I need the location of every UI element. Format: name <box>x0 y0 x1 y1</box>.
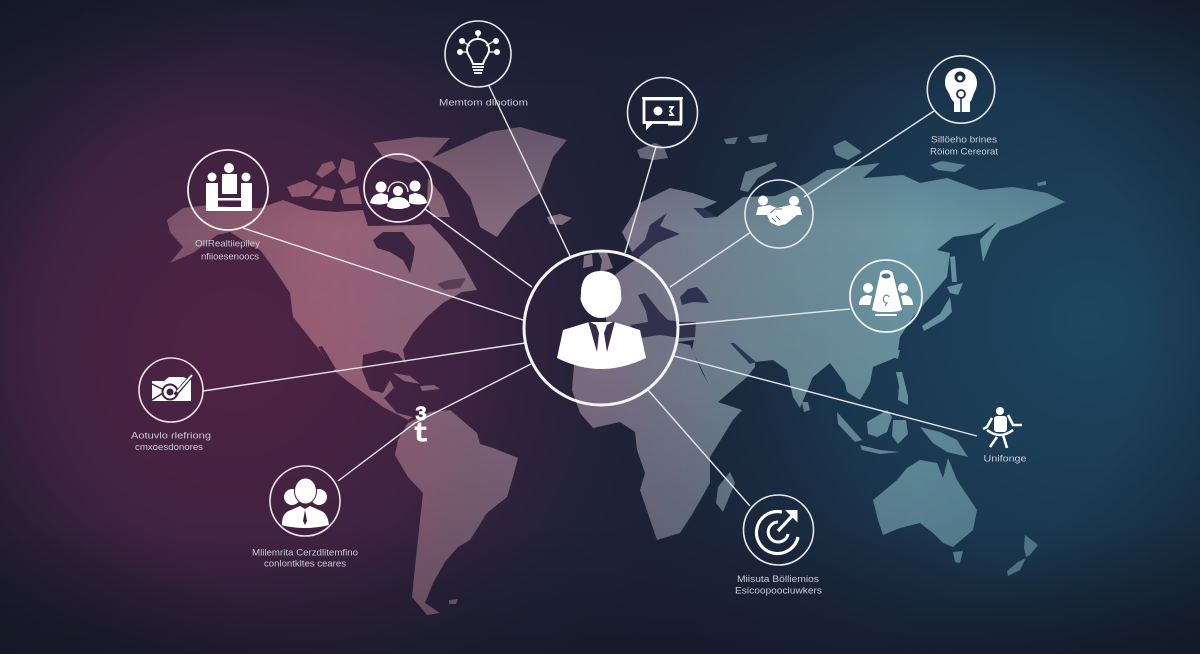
world map <box>167 127 1065 615</box>
connector lines <box>203 86 977 506</box>
uk and ireland <box>598 252 613 271</box>
label: target: Miisuta Bölliemios <box>737 574 819 585</box>
south america <box>395 410 518 615</box>
canadian arctic islands <box>287 158 362 204</box>
node: head profile <box>927 56 995 123</box>
svalbard and russian arctic islands <box>637 143 668 160</box>
node: camera with pencil <box>139 358 203 422</box>
caribbean islands <box>393 373 420 384</box>
gulf of california <box>318 346 336 370</box>
australia <box>873 458 977 547</box>
mediterranean <box>630 293 696 338</box>
label: lightbulb: Memtom dlnotiom <box>439 98 528 108</box>
node: presentation screen <box>628 78 698 148</box>
label: meeting group: OIIRealtiiepiley <box>195 238 260 250</box>
node: target with arrow <box>744 495 814 565</box>
label: business people <box>252 548 358 570</box>
label: head profile: Röiom Cereorat <box>930 146 998 158</box>
glyph: stray mark on line: t <box>413 420 429 450</box>
madagascar <box>716 472 735 512</box>
node: team with badge <box>850 260 922 332</box>
label: camera <box>131 430 211 453</box>
label: robot figure: Unifonge <box>984 454 1026 464</box>
inland seas <box>318 208 756 370</box>
greenland <box>427 127 567 237</box>
baltic sea <box>630 213 680 258</box>
node: team with focus <box>364 154 432 222</box>
label: camera: Aotuvlo ɾlefriong <box>131 430 211 442</box>
indonesia and new guinea <box>802 402 810 412</box>
tasmania and new zealand <box>953 551 963 563</box>
glyph: stray mark on line: 3 <box>415 404 427 427</box>
node: lightbulb <box>445 21 511 87</box>
node: robot figure <box>983 407 1022 448</box>
great lakes <box>437 278 466 290</box>
suit <box>557 322 646 369</box>
sakhalin and japan <box>950 256 957 282</box>
iceland <box>547 214 572 225</box>
label: business people: Mlilemrita Cerzdlitemfino <box>252 548 358 558</box>
central node: executive <box>524 251 678 405</box>
label: meeting group: nfiioesenoocs <box>201 252 259 262</box>
lapels and tie <box>588 321 615 352</box>
hudson bay <box>373 232 415 273</box>
label: camera: cmxoesdonores <box>135 442 203 453</box>
north america <box>167 200 477 420</box>
head <box>581 271 621 318</box>
white sea <box>693 208 717 218</box>
node: business people <box>270 466 340 536</box>
label: head profile <box>930 134 998 158</box>
label: business people: conlontkltes ceares <box>264 558 346 570</box>
africa <box>572 335 742 540</box>
eurasia <box>606 163 1065 408</box>
label: meeting group <box>195 238 260 262</box>
node: handshake <box>745 180 813 248</box>
label: target <box>735 574 822 596</box>
label: head profile: Sillöeho brines <box>931 134 997 146</box>
glyph: stray mark on line <box>413 404 429 450</box>
black sea <box>680 287 709 305</box>
falkland islands <box>449 599 458 604</box>
taiwan and philippines <box>895 350 900 359</box>
label: target: Esicoopoociuwkers <box>735 586 822 596</box>
node: meeting group <box>188 150 268 230</box>
persian gulf <box>730 343 756 364</box>
